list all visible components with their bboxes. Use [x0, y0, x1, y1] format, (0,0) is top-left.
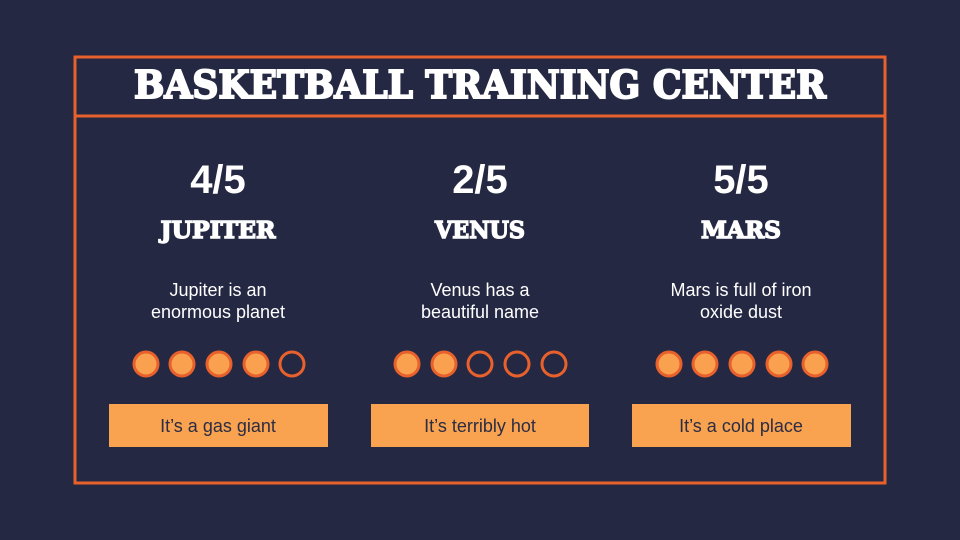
tag box	[371, 404, 589, 447]
column: mars: Mars is full of iron	[670, 280, 812, 300]
rating dots: 2 of 5	[395, 352, 566, 376]
tag box: It’s terribly hot	[424, 416, 536, 436]
column: mars: oxide dust	[700, 302, 782, 322]
tag box: It’s a cold place	[679, 416, 803, 436]
column: jupiter	[109, 158, 328, 447]
column: venus: 2/5	[452, 158, 508, 202]
column: mars: 5/5	[713, 158, 769, 202]
rating dots: 5 of 5	[657, 352, 827, 376]
title: BASKETBALL TRAINING CENTER	[134, 62, 826, 107]
column: jupiter: 4/5	[190, 158, 246, 202]
tag box	[632, 404, 851, 447]
column: venus: beautiful name	[421, 302, 539, 322]
column: jupiter: Jupiter is an	[169, 280, 267, 300]
column: mars: MARS	[701, 217, 781, 244]
column: venus: VENUS	[434, 217, 525, 244]
tag box: It’s a gas giant	[160, 416, 276, 436]
column: jupiter: JUPITER	[158, 217, 276, 244]
column: jupiter: enormous planet	[151, 302, 285, 322]
tag box	[109, 404, 328, 447]
rating dots: 4 of 5	[134, 352, 304, 376]
frame	[75, 57, 885, 483]
column: mars	[632, 158, 851, 447]
column: venus	[371, 158, 589, 447]
column: venus: Venus has a	[430, 280, 531, 300]
